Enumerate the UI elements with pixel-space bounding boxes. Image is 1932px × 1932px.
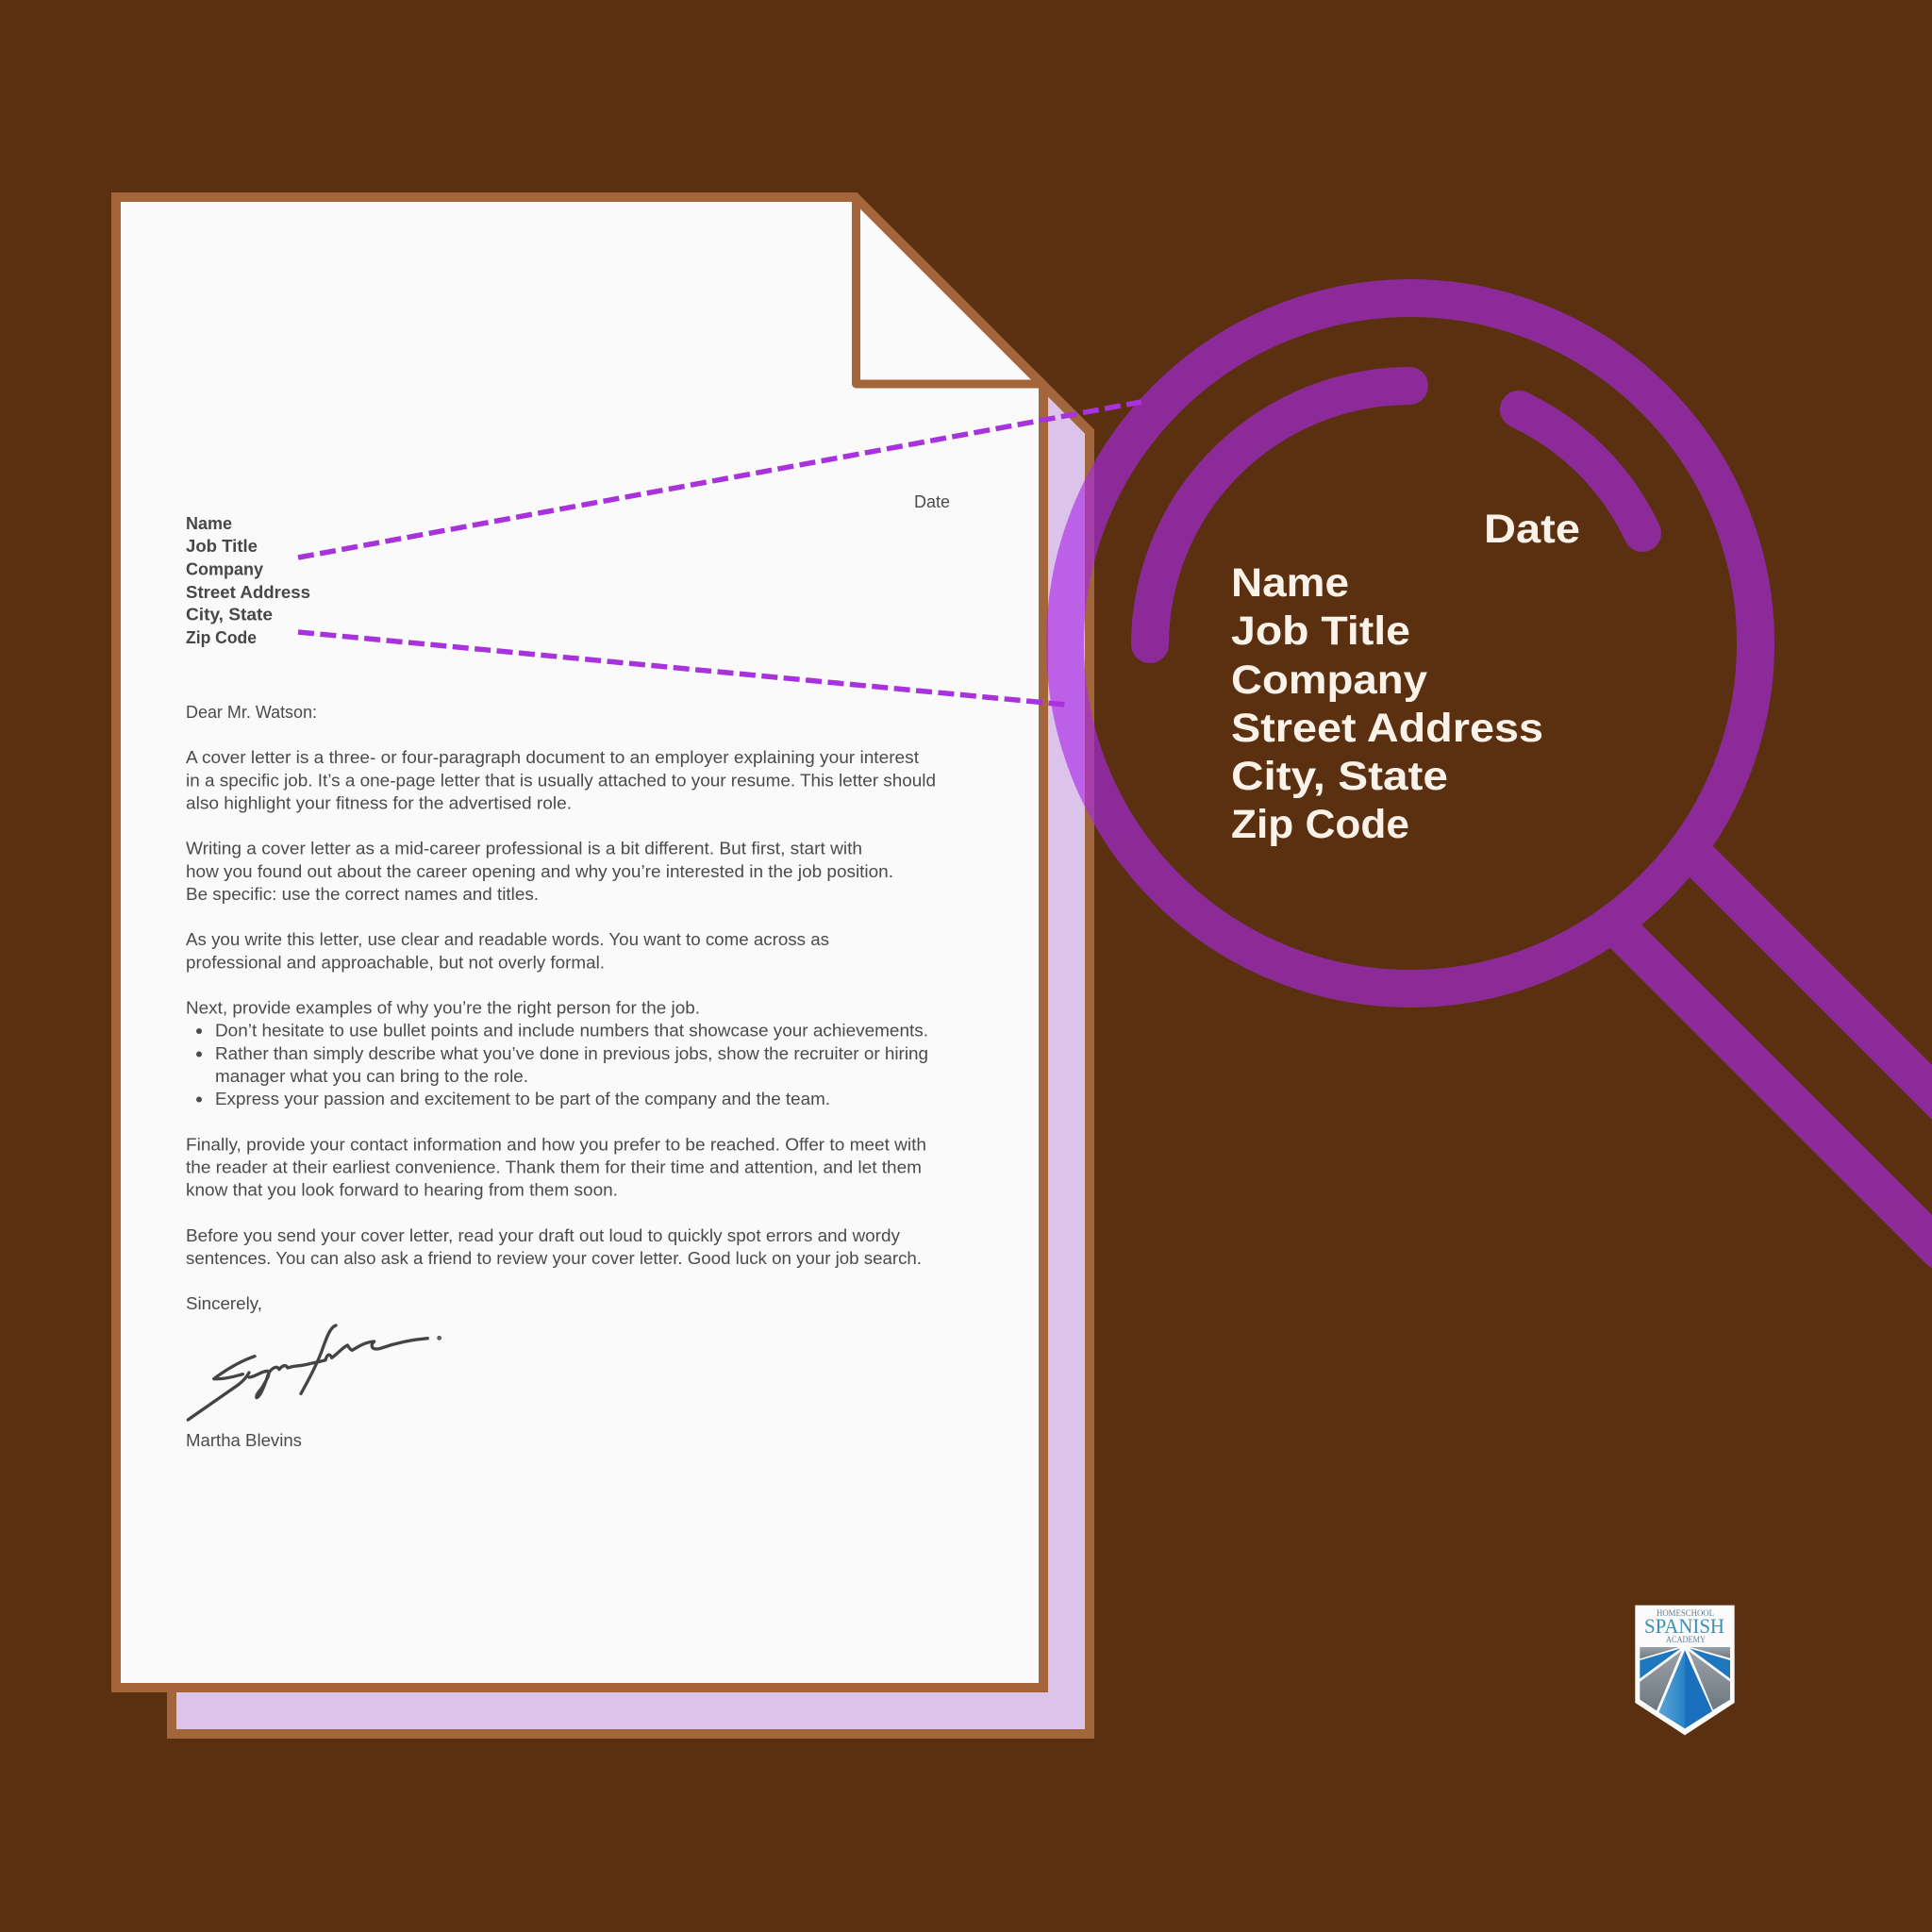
text block: recipient address: Zip Code bbox=[186, 628, 257, 647]
text block: paragraph 2: Be specific: use the correct names and titles. bbox=[186, 885, 539, 904]
text block: magnified address: Zip Code bbox=[1231, 802, 1409, 847]
text block: paragraph 4 with bullets: Express your passion and excitement to be part of the company and the team. bbox=[215, 1090, 830, 1108]
text block: paragraph 4 with bullets: manager what you can bring to the role. bbox=[215, 1067, 528, 1086]
text block: paragraph 4 with bullets: Don’t hesitate to use bullet points and include numbers that showcase your achievements. bbox=[215, 1022, 928, 1041]
text block: magnified address bbox=[1231, 560, 1543, 847]
icon: Homeschool Spanish Academy shield logo: SPANISH bbox=[1644, 1614, 1724, 1638]
text block: recipient address bbox=[186, 514, 310, 647]
text block: recipient address: City, State bbox=[186, 606, 273, 625]
arrow: dashed callout line to top of magnifier bbox=[298, 402, 1141, 558]
text block: paragraph 6 bbox=[186, 1226, 922, 1268]
icon: Homeschool Spanish Academy shield logo bbox=[1635, 1606, 1735, 1735]
text block: paragraph 4 with bullets: Next, provide examples of why you’re the right person for the job. bbox=[186, 999, 700, 1018]
text block: paragraph 1: A cover letter is a three- or four-paragraph document to an employer explaining your interest bbox=[186, 748, 919, 767]
text block: paragraph 5: Finally, provide your contact information and how you prefer to be reached. Offer to meet with bbox=[186, 1135, 926, 1154]
folded page corner bbox=[857, 200, 1043, 384]
icon: Homeschool Spanish Academy shield logo: HOMESCHOOL bbox=[1657, 1608, 1714, 1618]
text block: paragraph 3: As you write this letter, use clear and readable words. You want to come across as bbox=[186, 930, 829, 949]
arrow: dashed callout line to bottom of magnifier bbox=[298, 632, 1066, 705]
text block: paragraph 1: also highlight your fitness for the advertised role. bbox=[186, 794, 572, 813]
text block: magnified date: Date bbox=[1484, 507, 1580, 552]
text block: date: Date bbox=[914, 492, 950, 511]
text block: magnified address: Company bbox=[1231, 658, 1427, 703]
text block: magnified address: Job Title bbox=[1231, 608, 1410, 654]
text block: paragraph 1: in a specific job. It’s a one-page letter that is usually attached to your resume. This letter should bbox=[186, 771, 936, 790]
icon: magnifying glass bbox=[1065, 298, 1932, 1270]
text block: paragraph 4 with bullets bbox=[186, 999, 928, 1108]
text block: paragraph 5: know that you look forward to hearing from them soon. bbox=[186, 1181, 618, 1200]
text block: paragraph 2: Writing a cover letter as a mid-career professional is a bit different. But first, start with bbox=[186, 840, 862, 858]
text block: paragraph 5 bbox=[186, 1135, 926, 1200]
text block: signer name: Martha Blevins bbox=[186, 1431, 302, 1450]
text block: paragraph 3 bbox=[186, 930, 829, 972]
text block: paragraph 6: sentences. You can also ask a friend to review your cover letter. Good luck on your job search. bbox=[186, 1249, 922, 1268]
text block: paragraph 5: the reader at their earliest convenience. Thank them for their time and attention, and let them bbox=[186, 1158, 922, 1176]
text block: paragraph 2 bbox=[186, 840, 893, 904]
text block: magnified address: Street Address bbox=[1231, 706, 1543, 751]
text block: paragraph 4 with bullets: Rather than simply describe what you’ve done in previous jobs, show the recruiter or hiring bbox=[215, 1044, 928, 1063]
text block: paragraph 1 bbox=[186, 748, 936, 813]
text block: paragraph 6: Before you send your cover letter, read your draft out loud to quickly spot errors and wordy bbox=[186, 1226, 900, 1245]
text block: recipient address: Name bbox=[186, 514, 232, 533]
text block: paragraph 3: professional and approachable, but not overly formal. bbox=[186, 953, 605, 972]
panel: front cover letter page bbox=[116, 197, 1043, 1688]
text block: closing: Sincerely, bbox=[186, 1294, 262, 1313]
text block: recipient address: Company bbox=[186, 560, 263, 579]
text block: recipient address: Street Address bbox=[186, 583, 310, 602]
icon: Homeschool Spanish Academy shield logo: ACADEMY bbox=[1666, 1635, 1706, 1644]
text block: recipient address: Job Title bbox=[186, 537, 258, 556]
icon: handwritten signature bbox=[188, 1325, 440, 1420]
text block: magnified address: City, State bbox=[1231, 754, 1448, 799]
text block: salutation: Dear Mr. Watson: bbox=[186, 703, 317, 722]
text block: magnified address: Name bbox=[1231, 560, 1349, 606]
text block: paragraph 2: how you found out about the career opening and why you’re interested in the job position. bbox=[186, 862, 893, 881]
panel: back sheet of paper bbox=[172, 379, 1090, 1734]
